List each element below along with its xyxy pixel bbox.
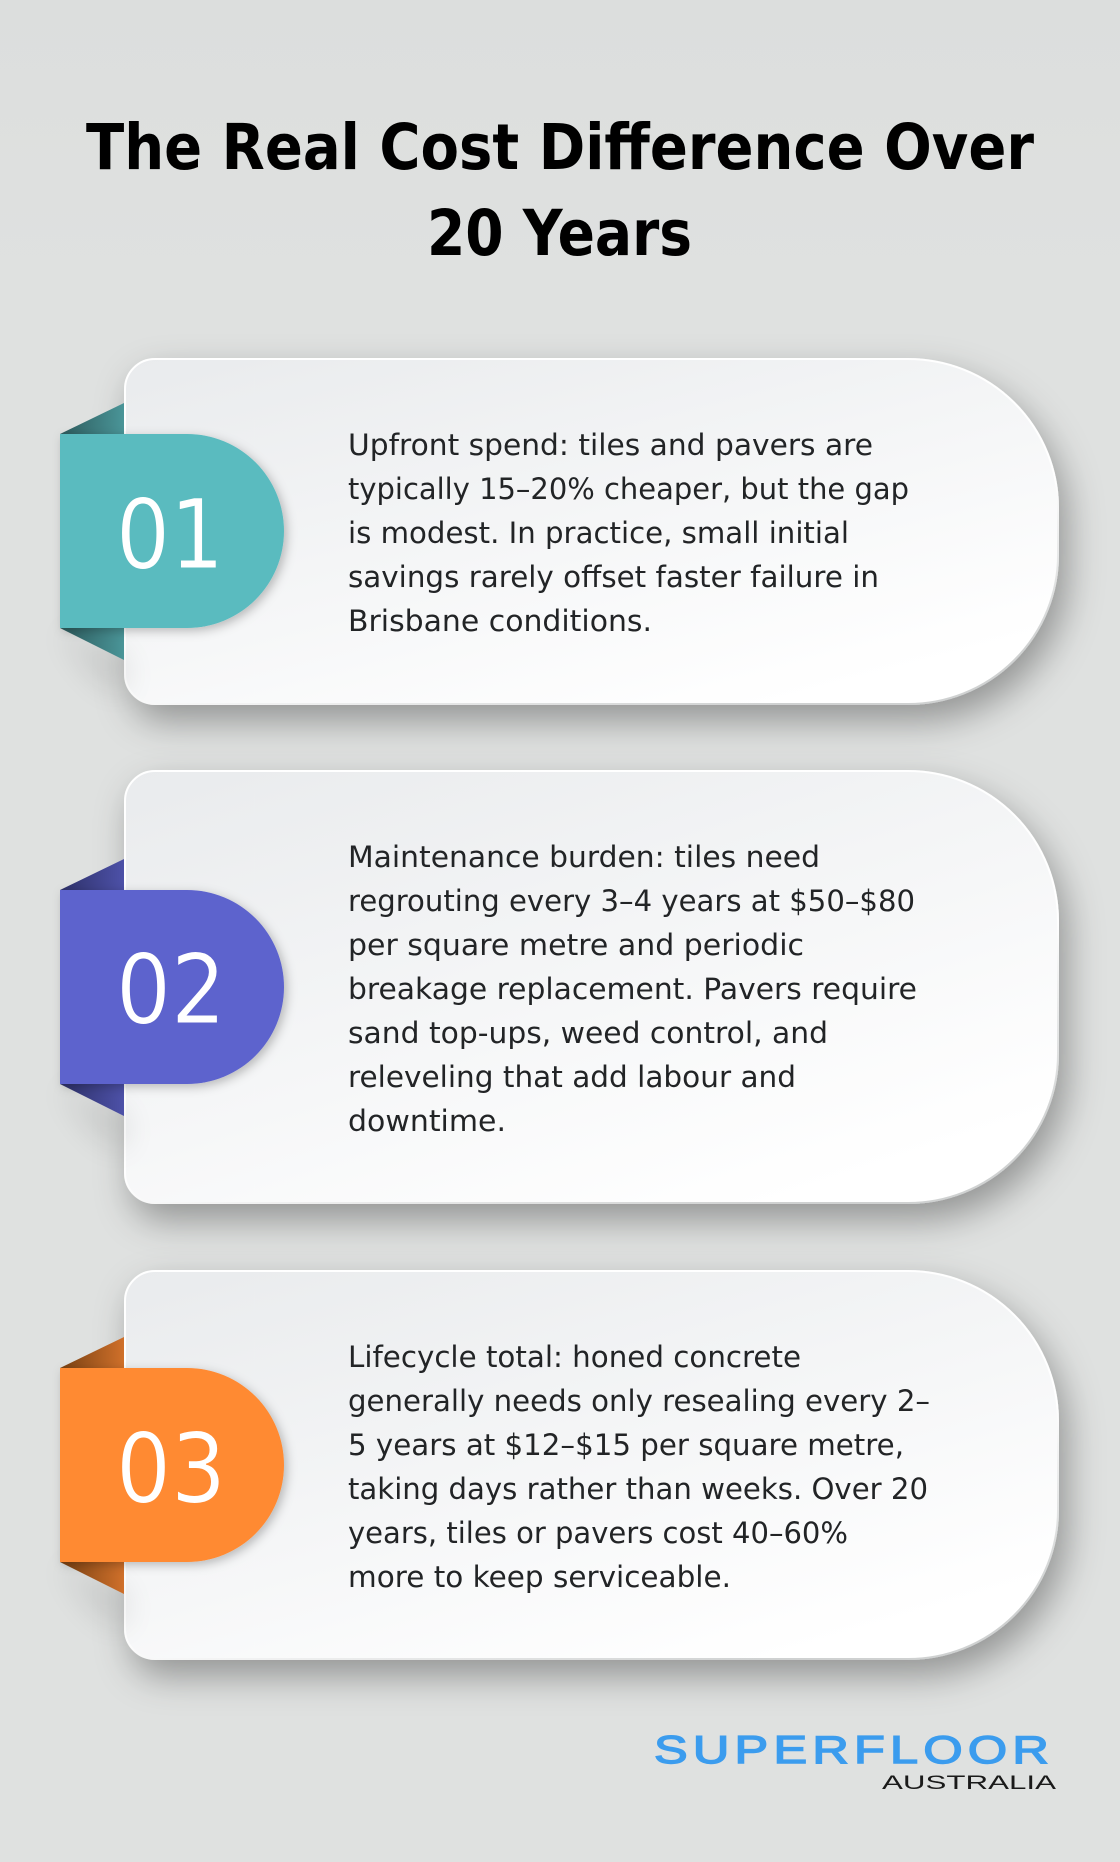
card background 2 <box>125 771 1058 1203</box>
ribbon fold top <box>60 859 124 890</box>
title <box>86 111 1034 270</box>
body text 3 <box>348 1340 930 1594</box>
ribbon shadow <box>60 1084 124 1151</box>
body text 2: sand top-ups, weed control, and <box>348 1016 828 1050</box>
number badge 02 <box>60 890 284 1084</box>
body text 3: taking days rather than weeks. Over 20 <box>348 1472 928 1506</box>
panel: step 3 lifecycle total <box>60 1271 1058 1659</box>
ribbon fold bottom <box>60 1562 124 1594</box>
body text 2 <box>348 840 917 1138</box>
body text 3: Lifecycle total: honed concrete <box>348 1340 801 1374</box>
body text 3: more to keep serviceable. <box>348 1560 731 1594</box>
ribbon shadow <box>60 1562 124 1629</box>
body text 2: downtime. <box>348 1104 506 1138</box>
logo: Superfloor Australia: AUSTRALIA <box>882 1772 1056 1794</box>
title: The Real Cost Difference Over <box>86 111 1034 184</box>
body text 3: generally needs only resealing every 2– <box>348 1384 930 1418</box>
number badge 03: 03 <box>116 1413 226 1525</box>
body text 3: 5 years at $12–$15 per square metre, <box>348 1428 904 1462</box>
body text 1 <box>348 428 909 638</box>
body text 1: is modest. In practice, small initial <box>348 516 849 550</box>
body text 2: regrouting every 3–4 years at $50–$80 <box>348 884 915 918</box>
logo: Superfloor Australia: SUPERFLOOR <box>654 1729 1054 1772</box>
body text 1: savings rarely offset faster failure in <box>348 560 879 594</box>
body text 2: breakage replacement. Pavers require <box>348 972 917 1006</box>
ribbon fold bottom <box>60 628 124 660</box>
ribbon fold top <box>60 1337 124 1368</box>
body text 1: Brisbane conditions. <box>348 604 652 638</box>
body text 2: releveling that add labour and <box>348 1060 796 1094</box>
body text 2: Maintenance burden: tiles need <box>348 840 820 874</box>
panel: step 1 upfront spend <box>60 359 1058 704</box>
number badge 01 <box>60 434 284 628</box>
body text 1: Upfront spend: tiles and pavers are <box>348 428 873 462</box>
number badge 01: 01 <box>116 479 224 591</box>
card background 1 <box>125 359 1058 704</box>
body text 1: typically 15–20% cheaper, but the gap <box>348 472 909 506</box>
ribbon shadow <box>60 628 124 695</box>
card background 3 <box>125 1271 1058 1659</box>
number badge 03 <box>60 1368 284 1562</box>
panel: step 2 maintenance burden <box>60 771 1058 1203</box>
ribbon fold bottom <box>60 1084 124 1116</box>
number badge 02: 02 <box>116 934 226 1046</box>
body text 2: per square metre and periodic <box>348 928 804 962</box>
ribbon fold top <box>60 403 124 434</box>
body text 3: years, tiles or pavers cost 40–60% <box>348 1516 848 1550</box>
logo: Superfloor Australia <box>654 1729 1056 1794</box>
title: 20 Years <box>427 197 692 270</box>
